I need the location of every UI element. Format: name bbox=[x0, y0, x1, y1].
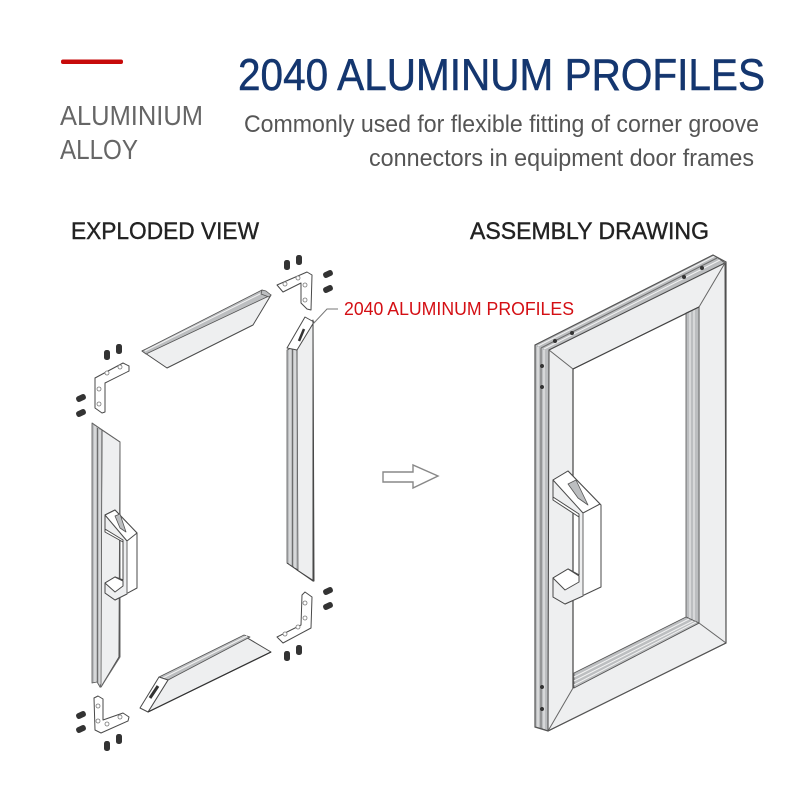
leader line to red label bbox=[313, 309, 338, 324]
inner opening edges bbox=[573, 307, 699, 688]
corner bracket: top left bbox=[95, 363, 129, 413]
red accent bar bbox=[61, 60, 123, 64]
exploded view diagram bbox=[75, 255, 574, 751]
left handle bbox=[105, 510, 137, 600]
slot marks bbox=[540, 266, 704, 711]
subtitle: connectors in equipment door frames bbox=[369, 145, 754, 172]
frame front face bbox=[535, 255, 726, 731]
arrow bbox=[383, 465, 438, 488]
inner recess: bottom side bbox=[574, 617, 699, 688]
top rail bbox=[142, 290, 271, 368]
corner bracket: bottom right bbox=[277, 592, 312, 643]
corner bracket: top right bbox=[277, 272, 312, 310]
frame handle bbox=[553, 471, 601, 604]
subtitle bbox=[244, 111, 759, 172]
assembly drawing bbox=[535, 255, 726, 731]
category label: aluminium alloy: ALLOY bbox=[60, 134, 138, 165]
category label: aluminium alloy bbox=[60, 100, 203, 165]
right vertical profile bbox=[287, 317, 314, 581]
title: 2040 ALUMINUM PROFILES bbox=[238, 51, 765, 100]
heading: assembly drawing: ASSEMBLY DRAWING bbox=[470, 218, 709, 245]
corner bracket: bottom left bbox=[94, 696, 129, 733]
set screws bbox=[75, 255, 334, 751]
red profile label: 2040 ALUMINUM PROFILES bbox=[344, 298, 574, 319]
left vertical profile bbox=[92, 423, 120, 687]
frame side rails bbox=[535, 255, 725, 731]
category label: aluminium alloy: ALUMINIUM bbox=[60, 100, 203, 131]
subtitle: Commonly used for flexible fitting of corner groove bbox=[244, 111, 759, 138]
bottom rail bbox=[140, 635, 271, 712]
heading: exploded view: EXPLODED VIEW bbox=[71, 218, 260, 245]
inner recess: right side bbox=[686, 307, 699, 623]
